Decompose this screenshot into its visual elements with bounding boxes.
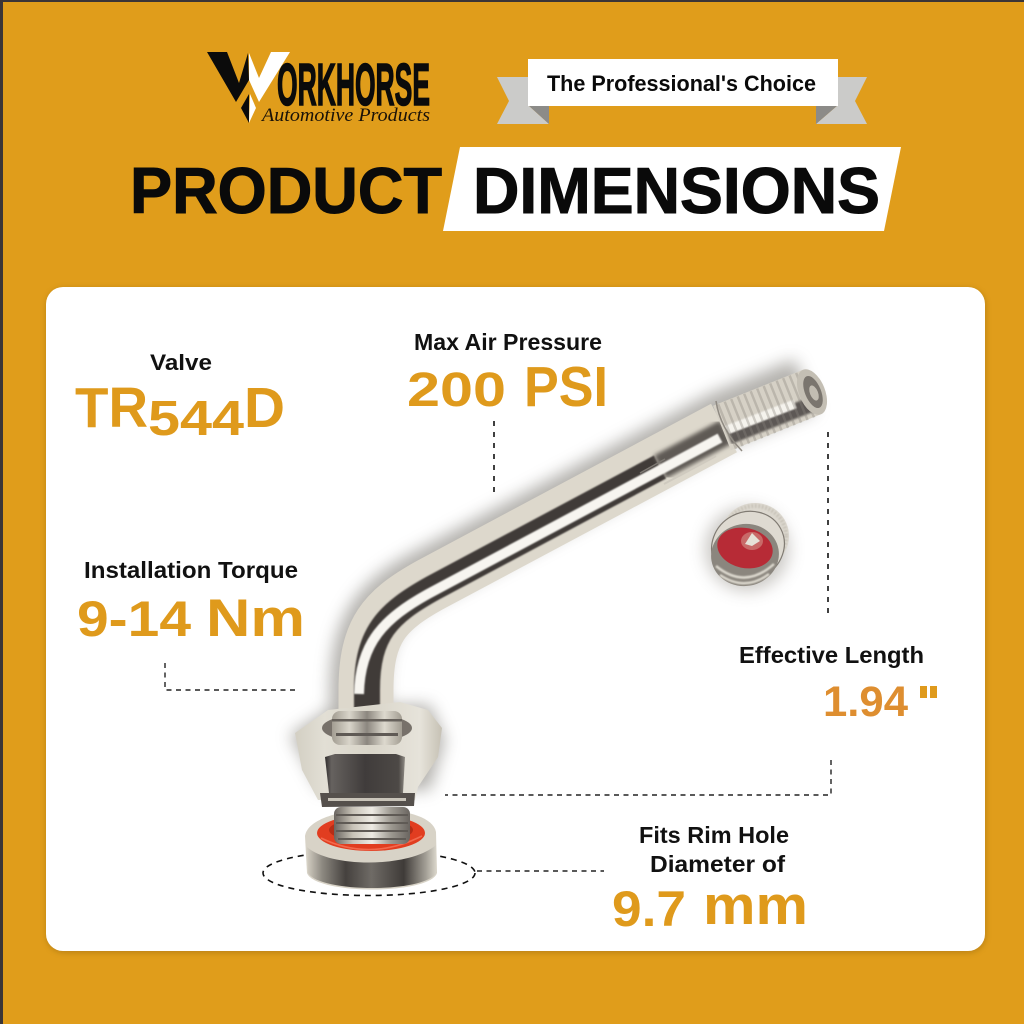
valve shadow (290, 385, 805, 790)
dashed leader: effective length top (827, 432, 829, 618)
pressure value: 200 (407, 364, 506, 417)
icon: valve cap (699, 499, 797, 593)
torque value: Nm (206, 589, 305, 648)
cap shadow (705, 507, 789, 591)
cap knurl texture (724, 506, 786, 566)
label: installation torque (77, 557, 305, 648)
label: rim hole diameter (612, 822, 808, 937)
hex nut (295, 702, 442, 807)
rim caption (639, 822, 789, 877)
ribbon folds (528, 105, 838, 124)
card shadow (46, 288, 986, 953)
torque value (77, 589, 305, 648)
ribbon text: The Professional's Choice (547, 71, 816, 96)
threaded tip (716, 365, 833, 451)
cap knurled body (721, 503, 789, 569)
ribbon panel (528, 59, 838, 106)
length value: 1.94 (823, 678, 908, 726)
title word: dimensions: DIMENSIONS (473, 154, 880, 227)
washer (320, 793, 415, 807)
ribbon tails (497, 77, 867, 124)
tube (355, 428, 726, 735)
flange with red seal (305, 810, 437, 890)
valve value: TR (75, 376, 148, 440)
valve value: D (244, 376, 285, 440)
torque caption: Installation Torque (84, 557, 298, 583)
logo tagline: Automotive Products (260, 105, 430, 126)
label: max air pressure (407, 329, 608, 419)
title word: product: PRODUCT (130, 154, 442, 227)
rim caption: Fits Rim Hole (639, 822, 789, 848)
dashed leader: installation torque (165, 663, 299, 690)
valve value: 544 (148, 392, 244, 446)
title banner (443, 147, 901, 231)
rim value: 9.7 (612, 881, 686, 937)
rim caption: Diameter of (650, 851, 785, 877)
collar above nut (332, 711, 402, 745)
pressure caption: Max Air Pressure (414, 329, 602, 355)
cap rim (699, 499, 797, 593)
icon: valve stem photo (290, 365, 833, 890)
valve value (75, 376, 285, 446)
ribbon badge (497, 59, 867, 124)
text: ORKHORSE (277, 52, 430, 118)
torque value: 9-14 (77, 591, 191, 647)
dark nut face (325, 754, 405, 793)
panel: white card (46, 287, 985, 951)
dashed leader: rim hole (477, 870, 604, 872)
dashed ellipse: rim hole (263, 850, 475, 896)
label: effective length (739, 642, 937, 726)
title (130, 147, 901, 231)
pressure value: PSI (524, 355, 608, 419)
rim value (612, 874, 808, 937)
cap red seal (713, 523, 777, 573)
cap pin (741, 532, 763, 550)
threaded stem (334, 807, 410, 844)
pressure value (407, 355, 608, 419)
rim value: mm (703, 874, 808, 936)
length caption: Effective Length (739, 642, 924, 668)
label: valve (75, 350, 285, 446)
cap threads (716, 564, 774, 583)
dashed leader: effective length bottom (445, 760, 831, 795)
logo: Workhorse Automotive Products (207, 52, 430, 126)
collar recess (322, 714, 412, 742)
cap opening (706, 519, 784, 591)
dashed leader: max air pressure (493, 421, 495, 496)
valve caption: Valve (150, 350, 212, 375)
logo mark (207, 52, 290, 123)
